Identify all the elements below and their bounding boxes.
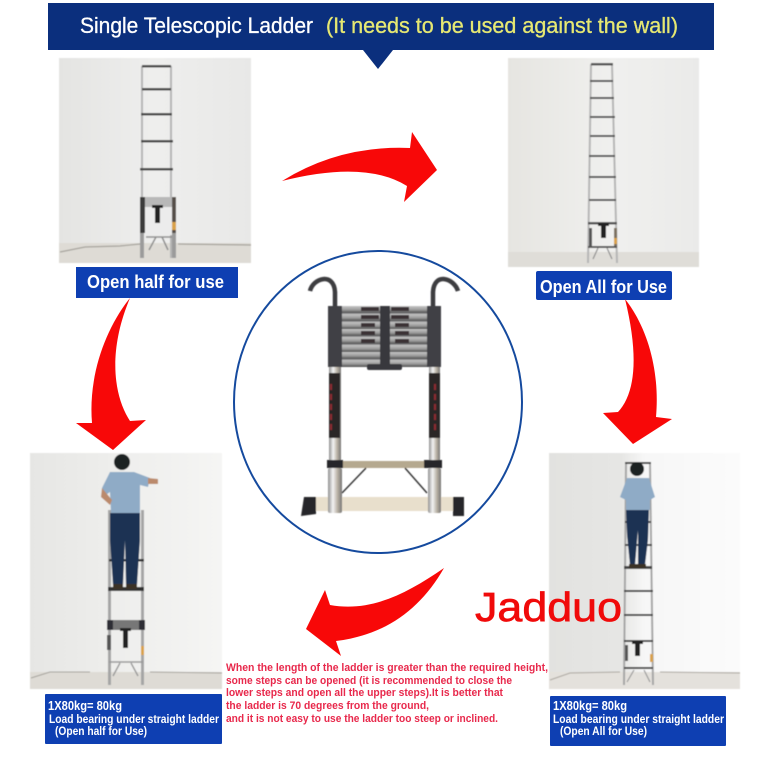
braces: [342, 468, 427, 493]
label: open half for use: [76, 267, 238, 298]
ladder: [624, 462, 653, 685]
wall requirement note: (It needs to be used against the wall): [326, 13, 678, 38]
arrow: left downward: [76, 298, 146, 450]
person: [620, 462, 655, 568]
upper poles: [329, 367, 341, 460]
label: open half for use: Open half for use: [87, 271, 224, 292]
panel: open half photo: [59, 58, 251, 263]
folded telescopic ladder: [301, 279, 464, 516]
brand name: Jadduo: [475, 584, 622, 630]
load label: open all: [550, 696, 726, 746]
person: [101, 454, 158, 589]
usage note: [226, 662, 548, 725]
label: open all for use: [536, 271, 672, 300]
base: [315, 497, 453, 511]
load label: open half: 1X80kg= 80kg: [48, 698, 122, 713]
label: open all for use: Open All for Use: [540, 276, 667, 297]
arrow: right downward: [603, 299, 672, 444]
load label: open all: Load bearing under straight ladder: [553, 712, 724, 726]
load label: open half: Load bearing under straight ladder: [49, 712, 219, 726]
load label: open all: (Open All for Use): [560, 724, 647, 738]
panel: person on half-open ladder photo: [30, 453, 222, 689]
title banner: [48, 3, 714, 69]
arrow: bottom leftward: [306, 568, 444, 656]
usage note: and it is not easy to use the ladder too steep or inclined.: [226, 713, 498, 725]
panel: person on fully-open ladder photo: [549, 453, 740, 689]
usage note: When the length of the ladder is greater than the required height,: [226, 662, 548, 674]
usage note: some steps can be opened (it is recommended to close the: [226, 675, 512, 687]
load label: open half: (Open half for Use): [55, 724, 147, 738]
crossbar and clamps: [343, 461, 425, 468]
lower tubes: [328, 468, 342, 513]
panel: centre circle with folded ladder: [234, 251, 522, 553]
ladder half open: [140, 65, 176, 258]
panel: open all photo: [508, 58, 699, 267]
load label: open half: [45, 694, 222, 744]
hooks: [310, 279, 458, 307]
ladder: [107, 510, 145, 685]
title text: Single Telescopic Ladder: [80, 13, 313, 38]
usage note: the ladder is 70 degrees from the ground,: [226, 700, 429, 712]
arrow: top to right: [282, 132, 437, 202]
load label: open all: 1X80kg= 80kg: [553, 698, 627, 713]
ladder fully open: [588, 63, 617, 263]
usage note: lower steps and open all the upper steps).It is better that: [226, 687, 503, 699]
